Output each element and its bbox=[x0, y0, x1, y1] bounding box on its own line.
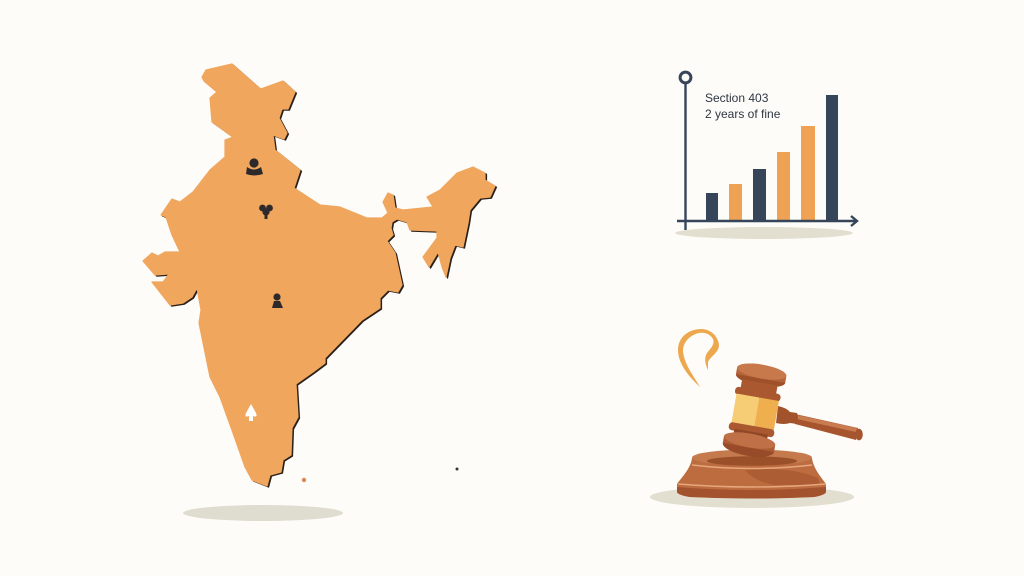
chart axes bbox=[677, 72, 857, 230]
chart label: Section 403 bbox=[705, 91, 769, 105]
gavel head bbox=[721, 360, 789, 460]
gavel base bbox=[677, 450, 826, 498]
map edge shadow bbox=[145, 65, 497, 487]
icon: person marker north bbox=[246, 158, 263, 176]
head top cap bbox=[735, 367, 786, 390]
gavel handle bbox=[776, 406, 863, 440]
gavel ground shadow bbox=[650, 486, 854, 508]
panel: gavel bbox=[650, 329, 863, 508]
panel: India map bbox=[143, 64, 497, 521]
India map shape bbox=[143, 64, 495, 486]
small dot bbox=[456, 468, 458, 470]
map ground shadow bbox=[183, 505, 343, 521]
chart label: 2 years of fine bbox=[705, 107, 781, 121]
icon: bust marker bbox=[272, 293, 283, 308]
icon: orange hook bbox=[678, 329, 719, 387]
bars bbox=[706, 95, 838, 221]
head collars and band bbox=[734, 386, 781, 402]
head bottom cap bbox=[721, 435, 775, 460]
icon: white spade marker bbox=[245, 404, 257, 421]
icon: scales marker bbox=[259, 205, 273, 219]
island dot bbox=[302, 478, 306, 482]
panel: bar chart bbox=[675, 72, 857, 239]
chart shadow bbox=[675, 227, 853, 239]
